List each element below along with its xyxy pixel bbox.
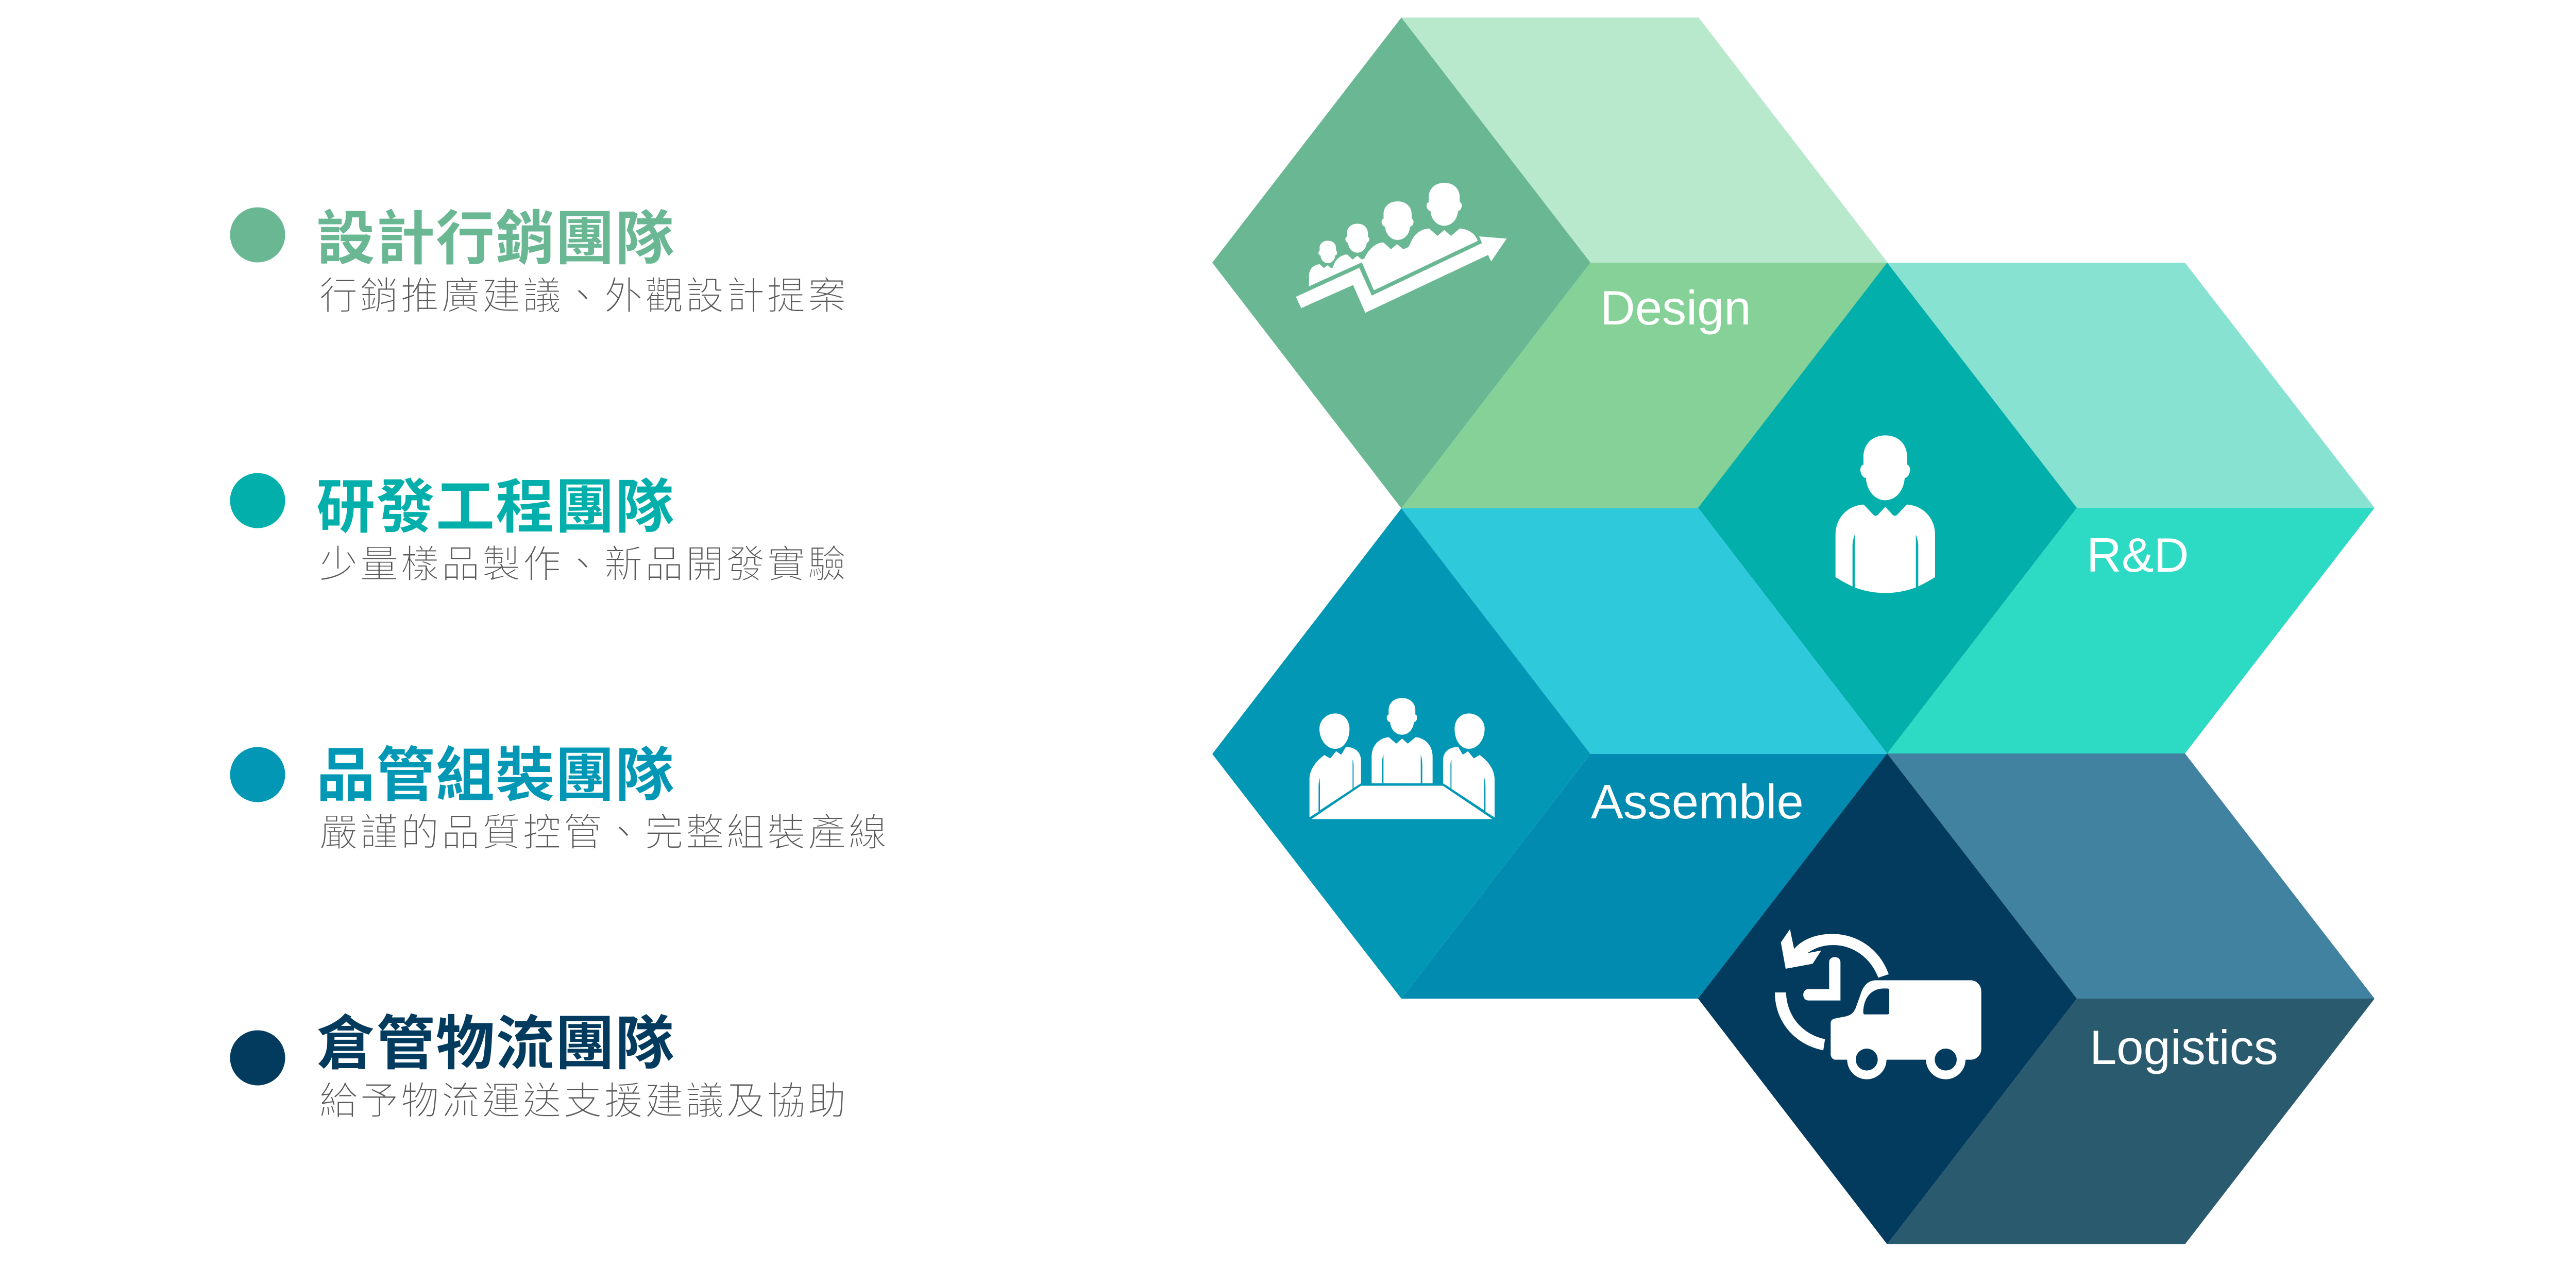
legend item: quality assembly team [230, 743, 889, 854]
face: design top [1401, 18, 1888, 263]
icon: delivery truck with clock [1775, 929, 1981, 1079]
heading: warehouse logistics team: 倉管物流團隊 [316, 1011, 675, 1077]
panel: design hexagon [1212, 18, 1888, 508]
description: warehouse logistics team: 給予物流運送支援建議及協助 [319, 1079, 849, 1122]
heading: design marketing team: 設計行銷團隊 [316, 207, 675, 272]
face: R&D bottom [1887, 508, 2375, 753]
face: assemble bottom [1401, 754, 1888, 999]
label: Logistics: Logistics [2090, 1020, 2278, 1074]
description: design marketing team: 行銷推廣建議、外觀設計提案 [319, 275, 849, 317]
face: design bottom [1401, 263, 1888, 508]
face: R&D top [1887, 263, 2375, 508]
face: assemble top [1401, 508, 1888, 754]
label: R&D: R&D [2087, 528, 2189, 582]
bullet: assembly [230, 747, 285, 802]
face: design icon rhombus [1212, 18, 1590, 508]
face: logistics top [1887, 753, 2375, 999]
heading: R&D engineering team: 研發工程團隊 [316, 475, 675, 540]
face: R&D icon rhombus [1698, 263, 2077, 753]
bullet: design [230, 207, 285, 263]
bullet: logistics [230, 1030, 285, 1086]
panel: assemble hexagon [1212, 508, 1888, 999]
legend item: warehouse logistics team [230, 1011, 849, 1122]
icon: person [1836, 435, 1935, 593]
panel: legend [230, 207, 889, 1122]
panel: R&D hexagon [1698, 263, 2375, 753]
icon: meeting table [1310, 698, 1495, 819]
bullet: R&D [230, 473, 285, 528]
face: assemble icon rhombus [1212, 508, 1590, 999]
legend item: design marketing team [230, 207, 849, 317]
label: Design: Design [1600, 281, 1751, 335]
legend item: R&D engineering team [230, 473, 849, 586]
description: R&D engineering team: 少量樣品製作、新品開發實驗 [319, 543, 849, 586]
face: logistics icon rhombus [1698, 753, 2077, 1244]
heading: quality assembly team: 品管組裝團隊 [316, 743, 675, 809]
face: logistics bottom [1887, 999, 2375, 1244]
panel: logistics hexagon [1698, 753, 2375, 1244]
label: Assemble: Assemble [1591, 775, 1804, 829]
description: quality assembly team: 嚴謹的品質控管、完整組裝產線 [319, 811, 889, 854]
icon: people with rising arrow [1296, 183, 1506, 313]
